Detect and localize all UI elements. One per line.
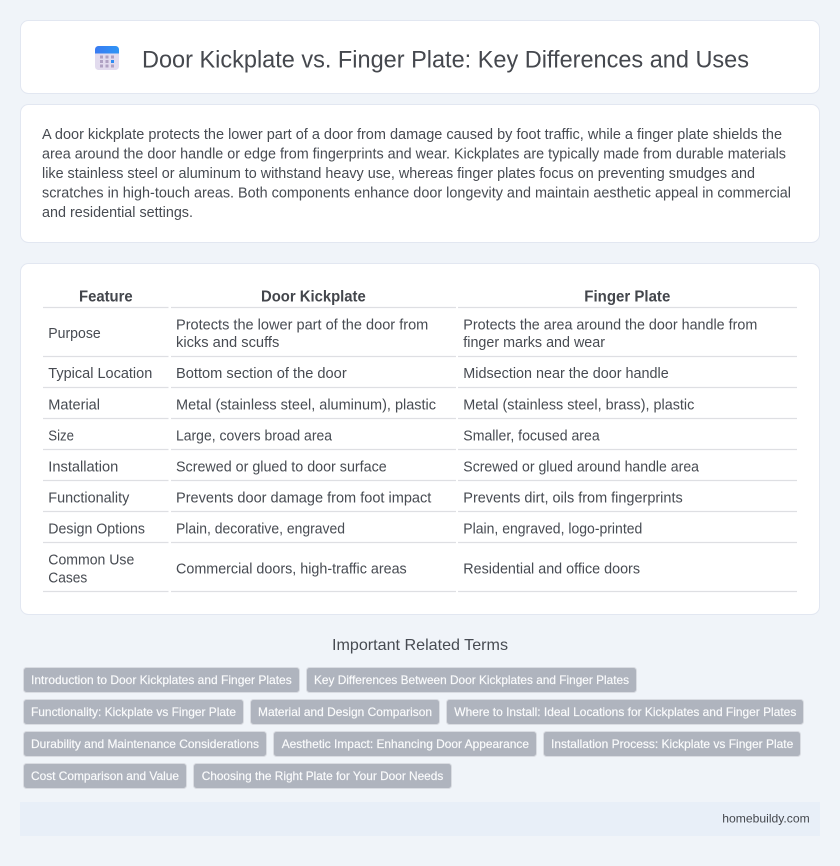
table header row: Door Kickplate: [261, 288, 366, 306]
tag: [306, 668, 636, 692]
panel: related term tags: [24, 668, 804, 788]
table header row: Finger Plate: [584, 288, 671, 306]
tag: Durability and Maintenance Considerations: [31, 737, 259, 751]
tag: Functionality: Kickplate vs Finger Plate: [31, 705, 236, 719]
icon: calendar grid: [95, 46, 119, 70]
row: material: Metal (stainless steel, aluminum), plastic: [176, 397, 436, 413]
row: typical location: Typical Location: [48, 366, 152, 382]
row: material: Material: [48, 397, 100, 413]
row: design options: [48, 521, 642, 537]
row: common use cases: Common Use: [48, 552, 134, 568]
row: common use cases: Commercial doors, high-traffic areas: [176, 561, 407, 577]
tag: [24, 764, 186, 788]
row: typical location: Bottom section of the door: [176, 366, 347, 382]
row: typical location: Midsection near the door handle: [463, 366, 669, 382]
tag: Choosing the Right Plate for Your Door Needs: [202, 769, 443, 783]
tag: [24, 732, 266, 756]
row: purpose: kicks and scuffs: [176, 335, 279, 351]
row: installation: Screwed or glued to door surface: [176, 459, 387, 475]
row: typical location: [48, 366, 669, 382]
text block: description: like stainless steel or aluminum to withstand heavy use, whereas finger plates focus on preventing smudges and: [42, 166, 755, 182]
row: common use cases: [48, 552, 640, 586]
row: size: Smaller, focused area: [463, 428, 600, 444]
tag: Introduction to Door Kickplates and Finger Plates: [31, 673, 292, 687]
panel: introduction: [20, 104, 820, 242]
text block: description: and residential settings.: [42, 205, 193, 221]
tag: Material and Design Comparison: [258, 705, 432, 719]
row: installation: Installation: [48, 459, 118, 475]
tag: Cost Comparison and Value: [31, 769, 179, 783]
row: purpose: finger marks and wear: [463, 335, 605, 351]
tag: Installation Process: Kickplate vs Finger Plate: [551, 737, 794, 751]
text block: description: [42, 127, 791, 221]
tag: [24, 668, 300, 692]
text block: description: scratches in high-touch areas. Both components enhance door longevity and maintain aesthetic appeal in commercial: [42, 186, 791, 202]
tag: Aesthetic Impact: Enhancing Door Appearance: [282, 737, 529, 751]
tag: [24, 700, 244, 724]
row: purpose: Protects the area around the door handle from: [463, 317, 757, 333]
row: common use cases: Cases: [48, 570, 87, 586]
row: design options: Plain, engraved, logo-printed: [463, 521, 642, 537]
tag: [274, 732, 536, 756]
footer source text: homebuildy.com: [722, 812, 810, 826]
text block: description: area around the door handle or edge from fingerprints and wear. Kickplates are typically made from durable materials: [42, 146, 786, 162]
table header row: Feature: [79, 288, 133, 306]
panel: comparison table: [20, 264, 820, 614]
row: installation: Screwed or glued around handle area: [463, 459, 699, 475]
row: purpose: Purpose: [48, 326, 101, 342]
heading: related terms: Important Related Terms: [332, 637, 508, 654]
row: functionality: Prevents door damage from foot impact: [176, 490, 431, 506]
row: purpose: Protects the lower part of the door from: [176, 317, 428, 333]
tag: [544, 732, 800, 756]
row: design options: Design Options: [48, 521, 145, 537]
row: size: Size: [48, 428, 74, 444]
row: functionality: Prevents dirt, oils from fingerprints: [463, 490, 683, 506]
tag: Where to Install: Ideal Locations for Kickplates and Finger Plates: [454, 705, 796, 719]
panel: header: [20, 20, 820, 94]
row: size: Large, covers broad area: [176, 428, 332, 444]
footer: [20, 802, 820, 836]
text block: description: A door kickplate protects the lower part of a door from damage caused by foot traffic, while a finger plate shields the: [42, 127, 782, 143]
row: installation: [48, 459, 699, 475]
row: size: [48, 428, 600, 444]
row: design options: Plain, decorative, engraved: [176, 521, 345, 537]
row: functionality: Functionality: [48, 490, 130, 506]
tag: [446, 700, 804, 724]
row: material: Metal (stainless steel, brass), plastic: [463, 397, 694, 413]
row: functionality: [48, 490, 683, 506]
table header row: [79, 288, 671, 306]
title: Door Kickplate vs. Finger Plate: Key Differences and Uses: [142, 46, 749, 74]
tag: Key Differences Between Door Kickplates and Finger Plates: [314, 673, 629, 687]
row: material: [48, 397, 694, 413]
tag: [194, 764, 452, 788]
tag: [250, 700, 440, 724]
row: purpose: [48, 317, 757, 351]
row: common use cases: Residential and office doors: [463, 561, 640, 577]
